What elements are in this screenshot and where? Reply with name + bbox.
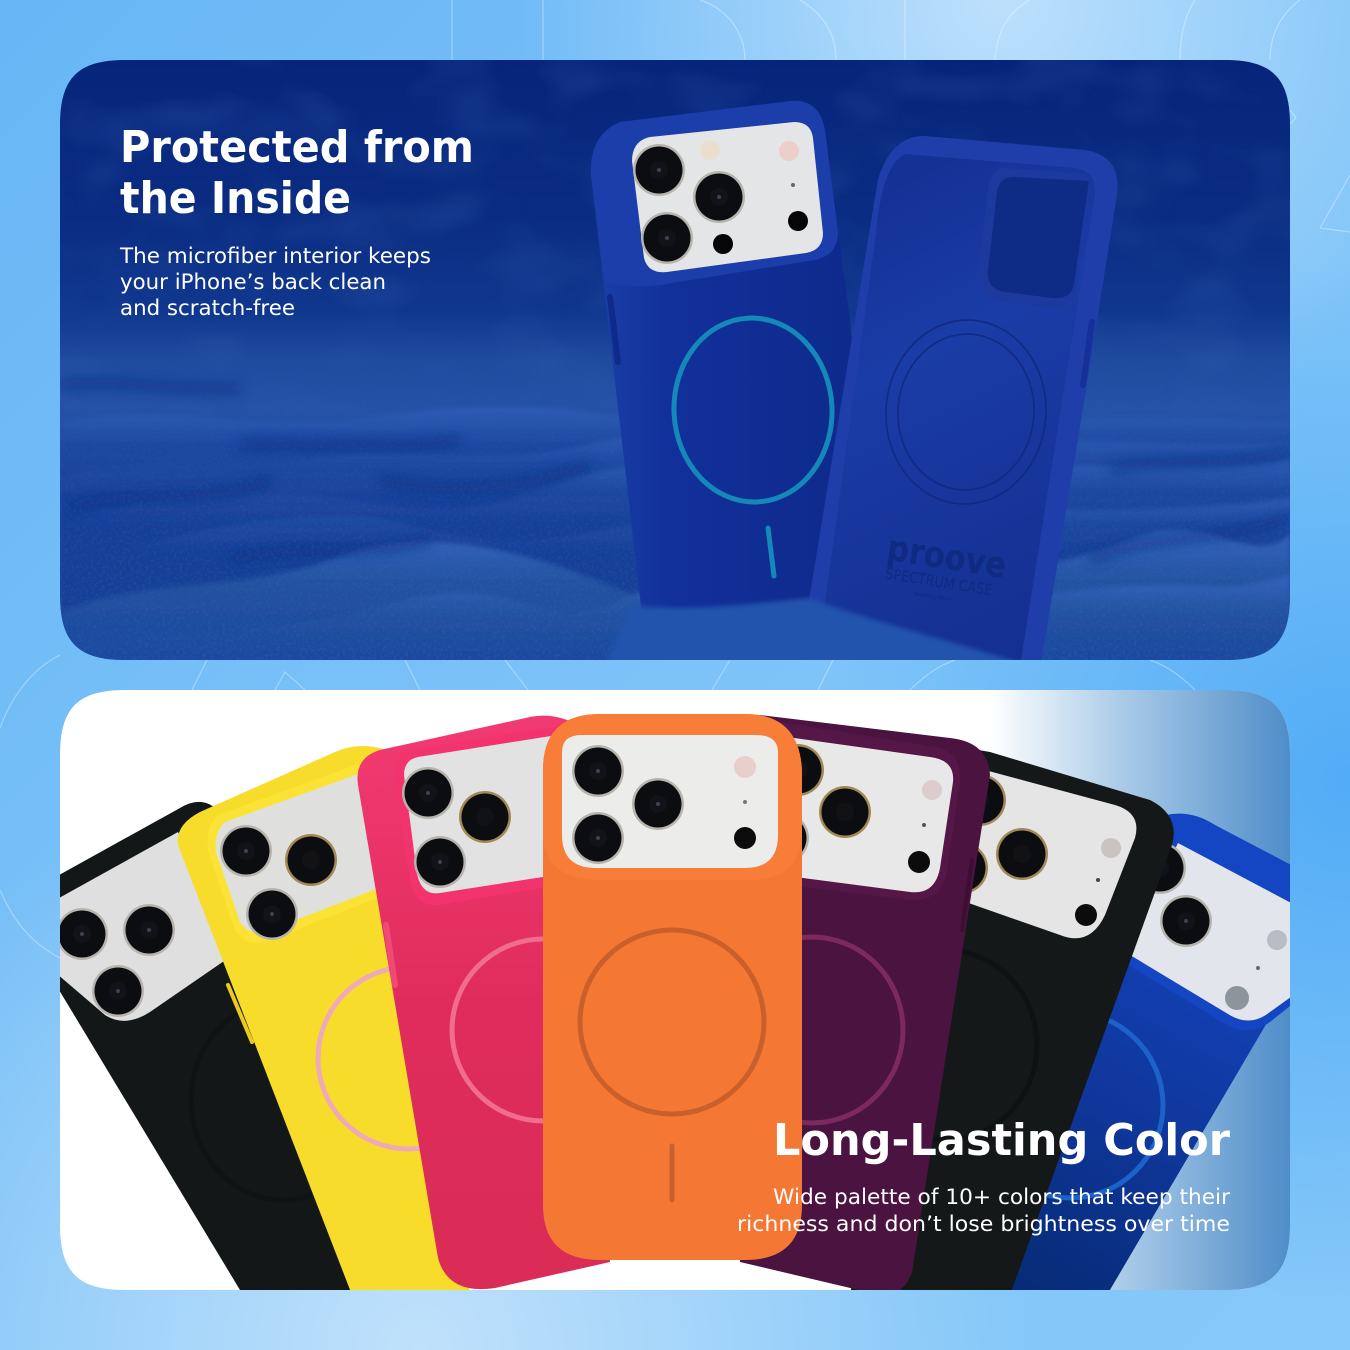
lenses bbox=[633, 140, 808, 264]
description: and scratch-free bbox=[120, 296, 295, 321]
magnetic line bbox=[768, 528, 774, 576]
heading: Protected from bbox=[120, 122, 474, 173]
heading: the Inside bbox=[120, 173, 351, 224]
interior rings bbox=[885, 319, 1047, 505]
phone: yellow bbox=[178, 746, 470, 1290]
camera glass bbox=[632, 122, 823, 272]
fleece texture bbox=[60, 476, 1286, 660]
brand mark: SPECTRUM CASE bbox=[884, 565, 994, 599]
phone: purple bbox=[721, 715, 990, 1295]
camera cutout bbox=[1004, 301, 1005, 302]
gradient backdrop bbox=[990, 690, 1290, 1290]
phone: black left bbox=[60, 802, 350, 1290]
description: richness and don’t lose brightness over time bbox=[737, 1212, 1230, 1237]
phone: case back view bbox=[590, 100, 852, 610]
microfiber interior bbox=[817, 154, 1095, 660]
description: Wide palette of 10+ colors that keep their bbox=[773, 1185, 1230, 1210]
brand mark bbox=[886, 540, 1004, 602]
magnetic ring bbox=[669, 314, 837, 506]
fabric background bbox=[60, 60, 1290, 670]
foreground fabric fold bbox=[609, 596, 1016, 660]
phone: pink bbox=[357, 716, 634, 1289]
phone: blue bbox=[1012, 814, 1290, 1290]
brand mark: proove bbox=[884, 528, 1009, 587]
phone: orange bbox=[543, 714, 802, 1260]
description: your iPhone’s back clean bbox=[120, 270, 386, 295]
description: The microfiber interior keeps bbox=[119, 244, 431, 269]
heading: Long-Lasting Color bbox=[773, 1115, 1230, 1166]
panel: protected from the inside bbox=[60, 60, 1290, 680]
phone: case interior view bbox=[800, 136, 1118, 670]
phone: black right bbox=[850, 745, 1174, 1295]
brand mark: designed by PROOVE bbox=[913, 591, 954, 603]
panel: long-lasting color bbox=[50, 690, 1295, 1295]
camera surround bbox=[591, 101, 838, 286]
